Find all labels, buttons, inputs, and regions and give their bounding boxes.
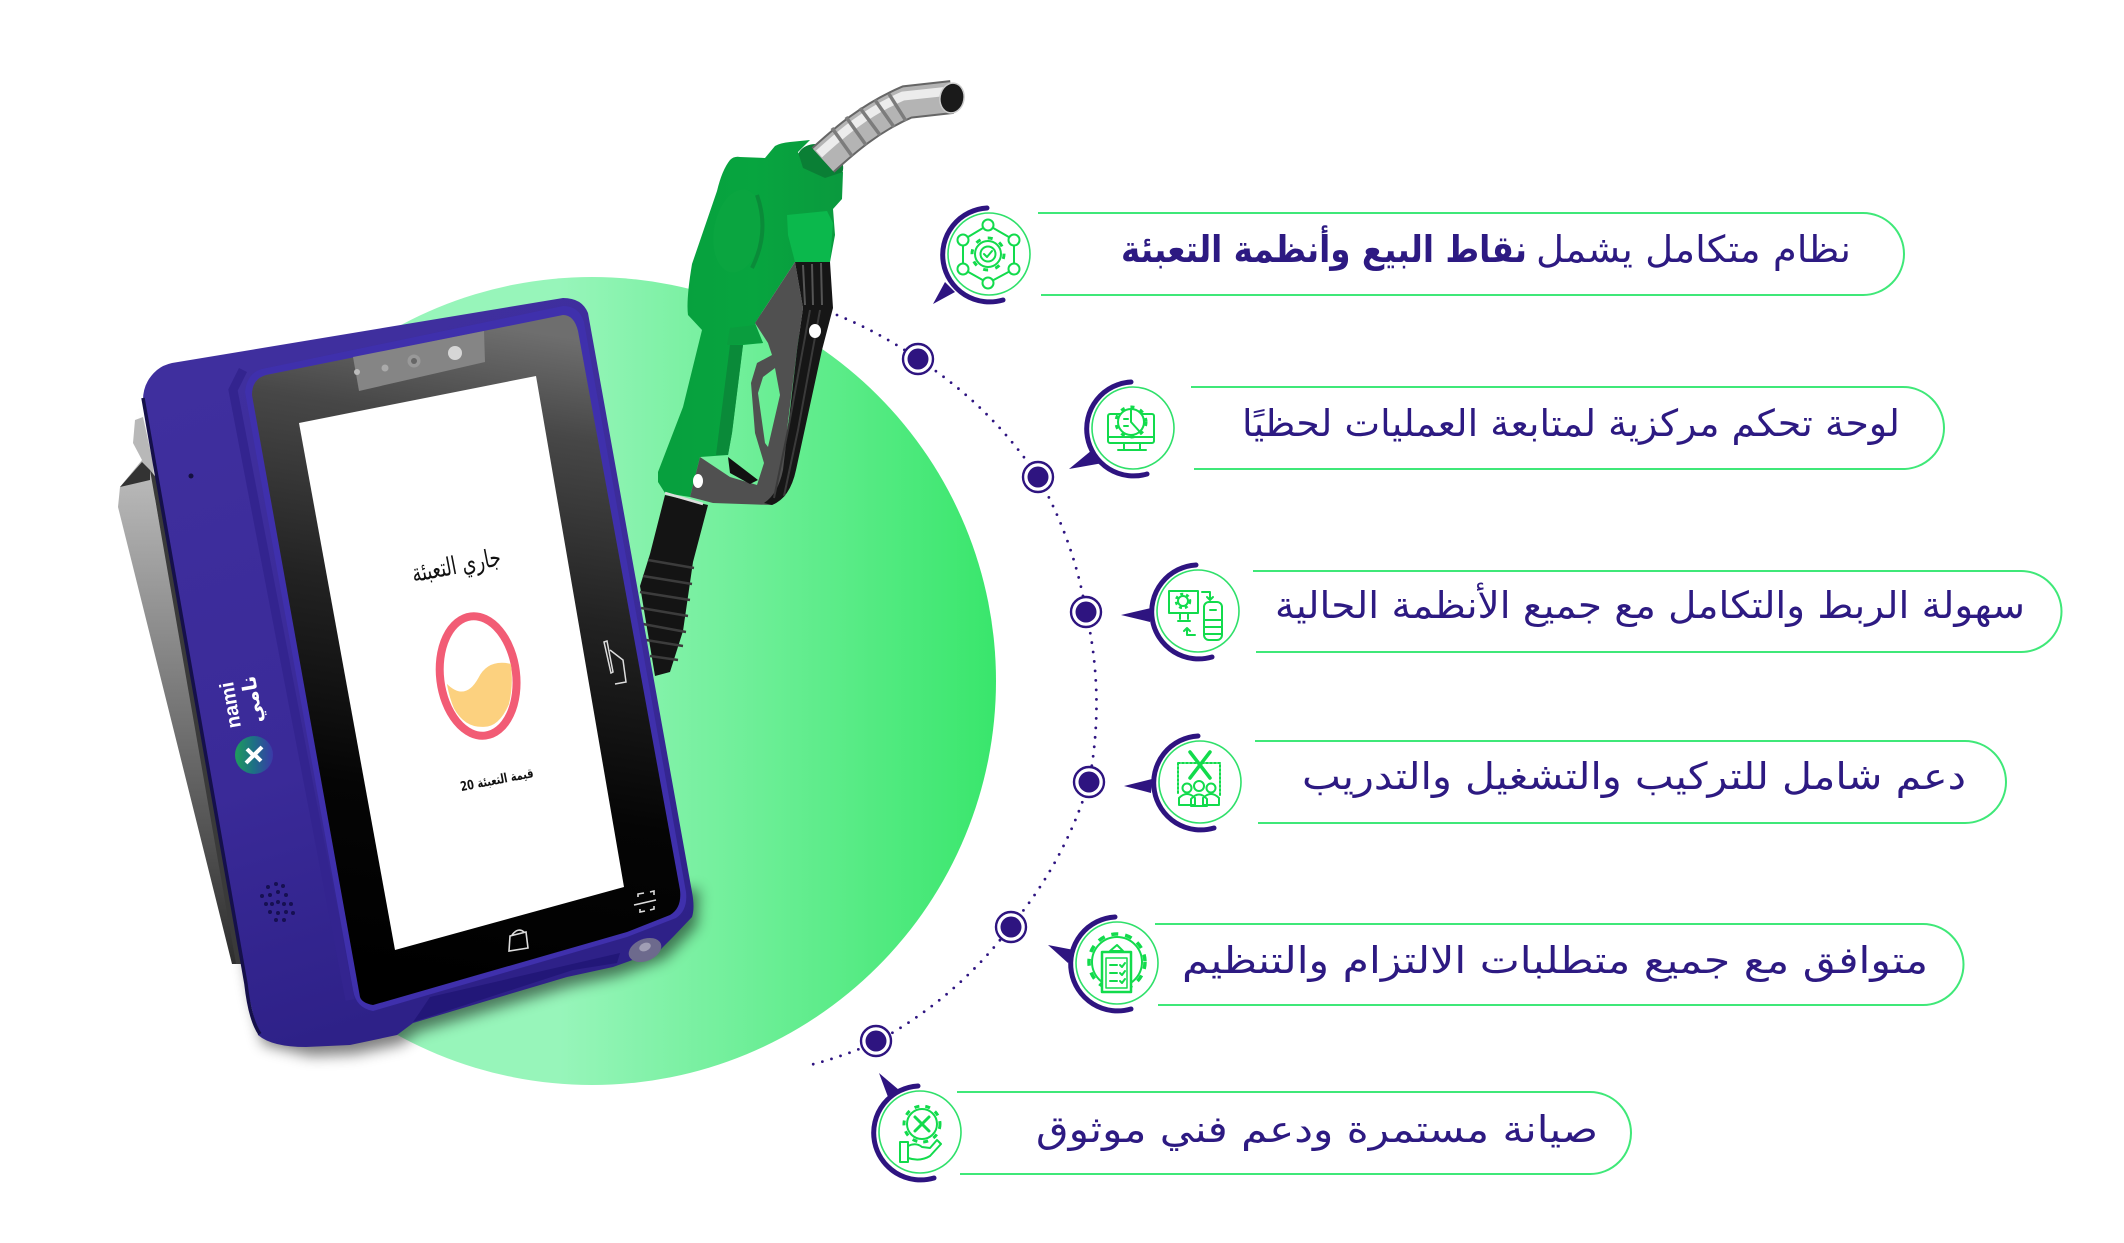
- home icon: [509, 930, 528, 951]
- microphone hole: [188, 474, 194, 478]
- device purple body: [143, 298, 694, 1047]
- green background circle: [188, 277, 996, 1085]
- icon badge: [933, 208, 1030, 304]
- device bezel: [252, 315, 680, 1005]
- nozzle ribbed grip: [665, 262, 833, 505]
- nozzle lever and trigger loop: [690, 262, 803, 505]
- brand arabic: نامي: [236, 674, 269, 725]
- device shadow: [148, 409, 699, 1056]
- pill outline: [1155, 924, 1964, 1005]
- row text: لوحة تحكم مركزية لمتابعة العمليات لحظيًا: [1242, 402, 1900, 445]
- timeline nodes: [861, 344, 1104, 1056]
- icon: maintenance hand: [900, 1106, 941, 1162]
- feature row 1: [933, 208, 1904, 304]
- pill outline: [1191, 387, 1944, 469]
- row text bold: نقاط البيع وأنظمة التعبئة: [1121, 225, 1527, 271]
- pill outline: [1253, 571, 2062, 652]
- bottom groove: [413, 953, 620, 1022]
- icon: tools and team: [1178, 752, 1220, 806]
- card slot icon: [604, 641, 626, 684]
- device screen: [299, 376, 624, 950]
- pill outline: [957, 1092, 1631, 1174]
- row text: دعم شامل للتركيب والتشغيل والتدريب: [1302, 755, 1966, 798]
- icon badge: [1121, 565, 1239, 659]
- nozzle black wedge: [728, 457, 758, 484]
- device grey back: [118, 417, 242, 964]
- icon: monitor with gear: [1108, 407, 1154, 450]
- device front rim: [245, 306, 686, 1011]
- icon badge: [874, 1073, 961, 1180]
- pill outline: [1038, 213, 1904, 295]
- dotted connector arc: [806, 315, 1096, 1066]
- row text: صيانة مستمرة ودعم فني موثوق: [1036, 1108, 1598, 1151]
- row text: متوافق مع جميع متطلبات الالتزام والتنظيم: [1182, 939, 1928, 982]
- payment device: [118, 298, 699, 1056]
- bottom lens: [625, 933, 665, 967]
- row text: سهولة الربط والتكامل مع جميع الأنظمة الحالية: [1275, 582, 2025, 627]
- brand latin: nami: [216, 680, 246, 730]
- icon badge: [1069, 382, 1174, 476]
- feature row 5: [1048, 917, 1964, 1011]
- icon badge: [1048, 917, 1158, 1011]
- fill gauge: [433, 612, 523, 740]
- feature row 2: [1069, 382, 1944, 476]
- nozzle spout: [819, 81, 966, 160]
- nozzle mouth collar: [790, 137, 850, 191]
- screen title: جاري التعبئة: [409, 542, 503, 588]
- icon: compliance checklist: [1089, 934, 1145, 992]
- nozzle hose: [640, 495, 708, 676]
- brand logo: [235, 736, 273, 774]
- fill value: قيمة التعبئة 20: [459, 766, 535, 795]
- fuel nozzle: [640, 81, 966, 676]
- icon: network gear: [958, 220, 1020, 288]
- side divider: [233, 370, 350, 1000]
- row text: نظام متكامل يشمل: [1536, 228, 1851, 271]
- feature row 6: [874, 1073, 1631, 1180]
- device left edge: [143, 398, 260, 1034]
- scan icon: [634, 891, 656, 912]
- speaker grille: [260, 882, 295, 922]
- camera bar: [353, 331, 485, 391]
- icon badge: [1124, 736, 1241, 830]
- feature row 4: [1124, 736, 2006, 830]
- feature row 3: [1121, 565, 2062, 659]
- icon: system integration: [1169, 591, 1222, 640]
- pill outline: [1255, 741, 2006, 823]
- nozzle green body: [658, 140, 843, 497]
